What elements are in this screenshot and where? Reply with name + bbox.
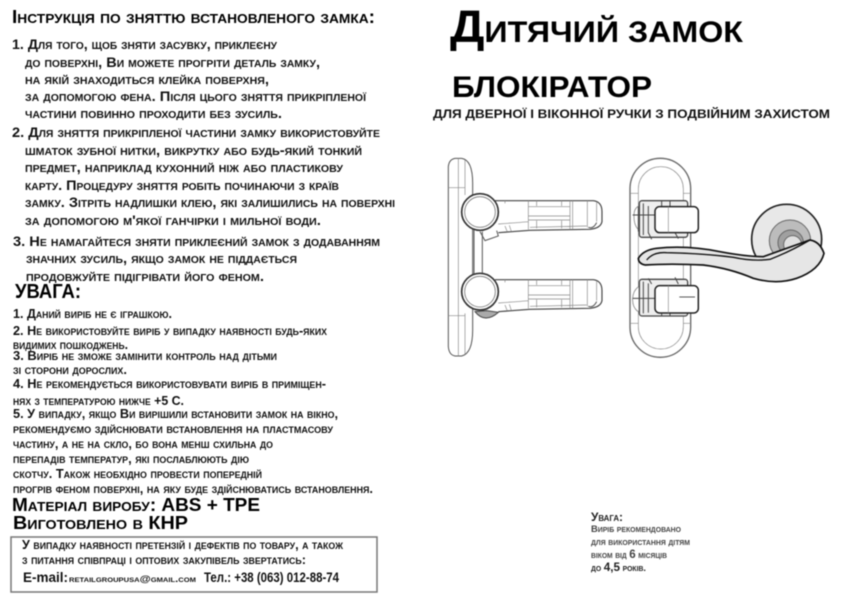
text block: warning 5: перепадів температур, які послаблюють дію [13,451,249,466]
sub-element: lower arm [475,280,602,318]
text block: warning 1: 1. Даний виріб не є іграшкою. [13,306,172,321]
text block: warning 5: прогрів феном поверхні, на яку буде здійснюватись встановлення. [13,481,373,496]
text block: instruction step 2: карту. Процедуру зняття робіть починаючи з країв [25,177,339,193]
text block: instruction step 2 [12,124,395,228]
text block: material and origin: Виготовлено в КНР [13,513,188,533]
text block: warning 3 [13,348,277,377]
heading: warning: УВАГА: [15,281,81,303]
text block: warning 5: рекомендуємо здійснювати встановлення на пластмасову [13,421,333,436]
sub-element: upper arm [480,201,602,241]
text block: warning 5: частину, а не на скло, бо вона менш схильна до [13,436,273,451]
text block: instruction step 3 [13,233,380,284]
text block: callout body: віком від 6 місяців [591,547,667,561]
text block: instruction step 1: на якій знаходиться клейка поверхня, [25,71,269,87]
heading: blocker: БЛОКІРАТОР [452,71,652,104]
text block: warning 2: 2. Не використовуйте виріб у випадку наявності будь-яких [13,323,327,338]
sub-element: upper lock block [633,201,698,239]
sub-element: handle rosette [752,204,822,274]
text block: instruction step 3: продовжуйте підігрівати його феном. [26,268,264,284]
panel: warnings [13,281,373,496]
text block: instruction step 3: значних зусиль, якщо замок не піддається [26,250,297,266]
text block: warning 4: нях з температурою нижче +5 С. [13,393,184,408]
text block: material and origin [12,495,260,533]
text block: warning 3: зі сторони дорослих. [13,362,127,377]
heading: subtitle: ДЛЯ ДВЕРНОЇ І ВІКОННОЇ РУЧКИ З ПОДВІЙНИМ ЗАХИСТОМ [433,106,830,121]
text block: callout body: для використання дітям [591,537,690,548]
text block: instruction step 2: за допомогою м'якої ганчірки і мильної води. [25,212,321,228]
text block: instruction step 2: замку. Зітріть надлишки клею, які залишились на поверхні [25,194,395,210]
illustration: lock open side view [448,158,602,356]
sub-element: base plate [630,158,691,357]
text block: instruction step 1: частини повинно проходити без зусиль. [25,105,282,121]
text block: warning 4: 4. Не рекомендується використовувати виріб в приміщен- [13,376,326,391]
text block: warning 5 [13,406,373,496]
text block: warning 3: 3. Виріб не зможе замінити контроль над дітьми [13,348,277,363]
text block: callout body: до 4,5 років. [591,560,646,574]
text block: instruction step 3: 3. Не намагайтеся зняти приклеєний замок з додаванням [13,233,380,249]
text block: warning 2: видимих пошкоджень. [13,337,128,352]
text block: warning 5: скотчу. Також необхідно провести попередній [13,466,262,481]
text block: warning 4 [13,376,326,408]
illustration: lock installed with door handle [630,158,824,357]
sub-element: lower knob [462,273,498,310]
text block: claims note: з питання співпраці і оптових закупівель звертатись: [22,552,306,567]
heading: callout warning: Увага: [591,510,623,524]
panel: contact box [11,537,377,592]
text block: instruction step 2: шматок зубної нитки, викрутку або будь-який тонкий [25,142,362,158]
sub-element: lower lock block [633,277,698,316]
callout: age recommendation [591,510,690,574]
text block: material and origin: Матеріал виробу: ABS + TPE [12,495,260,515]
text block: warning 2 [13,323,327,352]
text block: instruction step 2: предмет, наприклад кухонний ніж або пластикову [25,159,344,175]
text block: email and phone: retailgroupusa@gmail.com [69,574,196,584]
text block: instruction step 1: за допомогою фена. Після цього зняття прикріпленої [25,88,366,104]
title: product name: ДИТЯЧИЙ ЗАМОК [450,1,744,52]
sub-element: upper knob [462,194,498,230]
text block: email and phone: E-mail: [23,569,68,585]
text block: callout body [591,524,690,574]
text block: callout body: Виріб рекомендовано [591,524,682,535]
text block: instruction step 1: до поверхні, Ви можете прогріти деталь замку, [25,54,320,70]
text block: email and phone: Тел.: +38 (063) 012-88-74 [204,569,339,585]
text block: warning 5: 5. У випадку, якщо Ви вирішили встановити замок на вікно, [13,406,338,421]
text block: email and phone [23,569,339,585]
text block: claims note: У випадку наявності претензій і дефектів по товару, а також [22,537,344,552]
sub-element: door lever [638,240,824,282]
text block: instruction step 1 [12,36,366,121]
panel: removal instructions [12,7,395,284]
heading: removal instructions: Інструкція по зняттю встановленого замка: [12,7,375,27]
text block: claims note [22,537,344,567]
text block: instruction step 1: 1. Для того, щоб зняти засувку, приклеєну [12,36,278,52]
text block: instruction step 2: 2. Для зняття прикріпленої частини замку використовуйте [12,124,380,140]
